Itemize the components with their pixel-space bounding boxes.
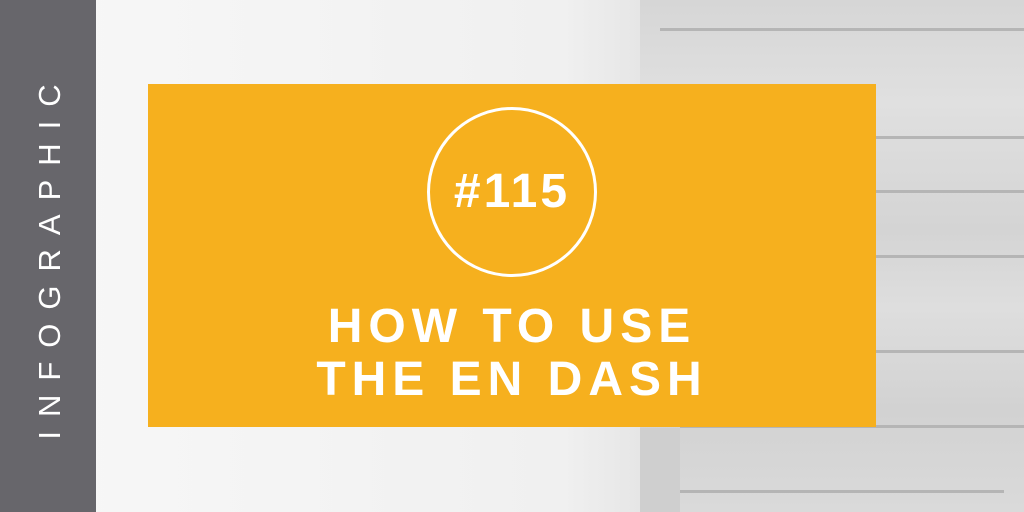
- heading: HOW TO USE: [328, 300, 696, 353]
- sidebar: infographic label: [0, 0, 96, 512]
- sidebar text: INFOGRAPHIC: [32, 70, 67, 440]
- badge circle with number: [427, 107, 597, 277]
- heading: [316, 300, 708, 406]
- badge circle with number: #115: [454, 165, 570, 218]
- background: book stack: [640, 0, 1024, 512]
- panel: title box: [148, 84, 876, 427]
- heading: THE EN DASH: [316, 353, 708, 406]
